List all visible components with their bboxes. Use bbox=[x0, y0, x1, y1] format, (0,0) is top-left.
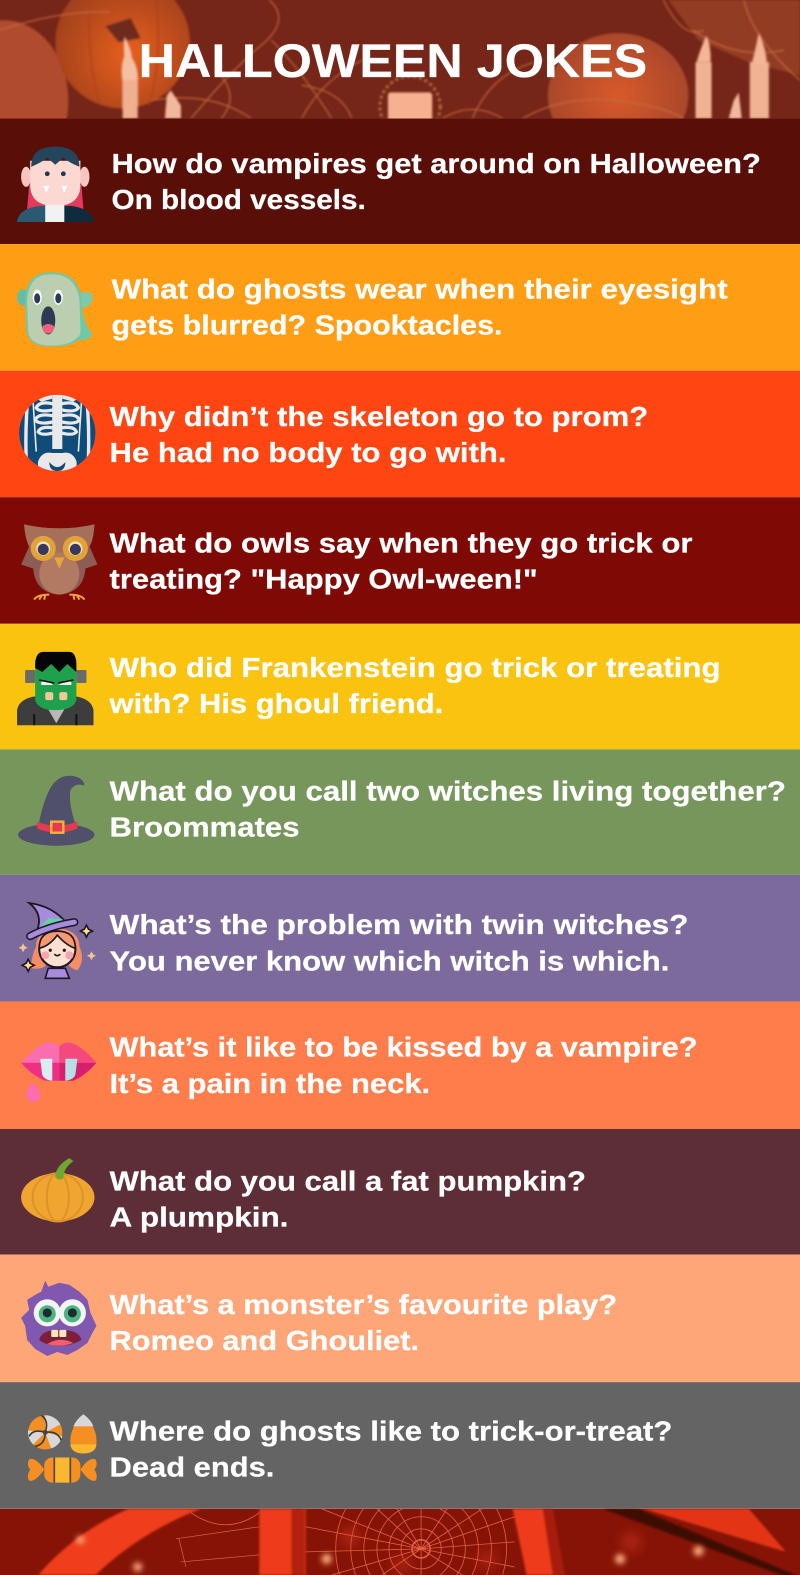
joke text: What’s it like to be kissed by a vampire? bbox=[110, 1032, 697, 1063]
joke text bbox=[110, 776, 786, 843]
spider web bbox=[176, 1508, 515, 1575]
joke text: It’s a pain in the neck. bbox=[110, 1068, 430, 1099]
joke text: What do ghosts wear when their eyesight bbox=[112, 273, 728, 304]
icon: vampire lips bbox=[21, 1043, 96, 1102]
joke text bbox=[110, 909, 688, 976]
joke text: Who did Frankenstein go trick or treating bbox=[110, 652, 721, 683]
joke text: You never know which witch is which. bbox=[110, 945, 669, 976]
joke text: A plumpkin. bbox=[110, 1201, 288, 1232]
joke text: Dead ends. bbox=[110, 1452, 274, 1483]
footer banner: spider web and branches bbox=[0, 1508, 800, 1575]
joke text: What do you call two witches living together? bbox=[110, 776, 786, 807]
panel: vampire kiss joke bbox=[0, 1001, 800, 1129]
icon: purple monster bbox=[21, 1281, 96, 1356]
joke text: Why didn’t the skeleton go to prom? bbox=[110, 401, 648, 432]
joke text: gets blurred? Spooktacles. bbox=[112, 309, 503, 340]
panel: ghost joke bbox=[0, 244, 800, 371]
icon: ghost bbox=[17, 272, 93, 347]
joke text bbox=[110, 1032, 697, 1099]
joke text bbox=[110, 1165, 586, 1232]
joke text bbox=[110, 401, 648, 468]
title: HALLOWEEN JOKES bbox=[139, 35, 647, 88]
panel: Frankenstein joke bbox=[0, 624, 800, 749]
joke text: What’s the problem with twin witches? bbox=[110, 909, 688, 940]
panel: vampire joke bbox=[0, 119, 800, 244]
joke text bbox=[110, 527, 693, 595]
header banner: candles and pumpkins bbox=[0, 0, 800, 181]
panel: trick-or-treat joke bbox=[0, 1382, 800, 1509]
panel: monster joke bbox=[0, 1255, 800, 1382]
icon: witch hat bbox=[18, 776, 94, 846]
joke text: Romeo and Ghouliet. bbox=[110, 1325, 419, 1356]
panel: skeleton joke bbox=[0, 371, 800, 497]
joke text: What do you call a fat pumpkin? bbox=[110, 1165, 586, 1196]
joke text: Broommates bbox=[110, 812, 299, 843]
bokeh lights bbox=[76, 1530, 704, 1571]
joke text: On blood vessels. bbox=[112, 184, 366, 215]
icon: witch girl bbox=[19, 903, 96, 978]
icon: x-ray skeleton bbox=[19, 395, 95, 471]
joke text: How do vampires get around on Halloween? bbox=[112, 148, 761, 179]
icon: Frankenstein bbox=[17, 652, 93, 725]
panel: twin witches joke bbox=[0, 875, 800, 1001]
joke text: with? His ghoul friend. bbox=[108, 688, 443, 719]
joke text: What do owls say when they go trick or bbox=[110, 527, 693, 558]
joke text: What’s a monster’s favourite play? bbox=[110, 1289, 617, 1320]
joke text: treating? "Happy Owl-ween!" bbox=[110, 564, 538, 595]
icon: owl bbox=[21, 524, 97, 600]
panel: pumpkin joke bbox=[0, 1129, 800, 1255]
joke text bbox=[112, 273, 728, 340]
panel: owl joke bbox=[0, 497, 800, 624]
joke text bbox=[110, 1289, 617, 1356]
panel: witch hat joke bbox=[0, 749, 800, 875]
joke text bbox=[112, 148, 761, 215]
icon: candies bbox=[28, 1414, 97, 1483]
joke text bbox=[110, 1415, 672, 1483]
icon: pumpkin bbox=[21, 1158, 94, 1221]
joke text: He had no body to go with. bbox=[110, 437, 507, 468]
joke text: Where do ghosts like to trick-or-treat? bbox=[110, 1415, 672, 1446]
joke text bbox=[108, 652, 721, 719]
icon: vampire bbox=[17, 147, 93, 222]
